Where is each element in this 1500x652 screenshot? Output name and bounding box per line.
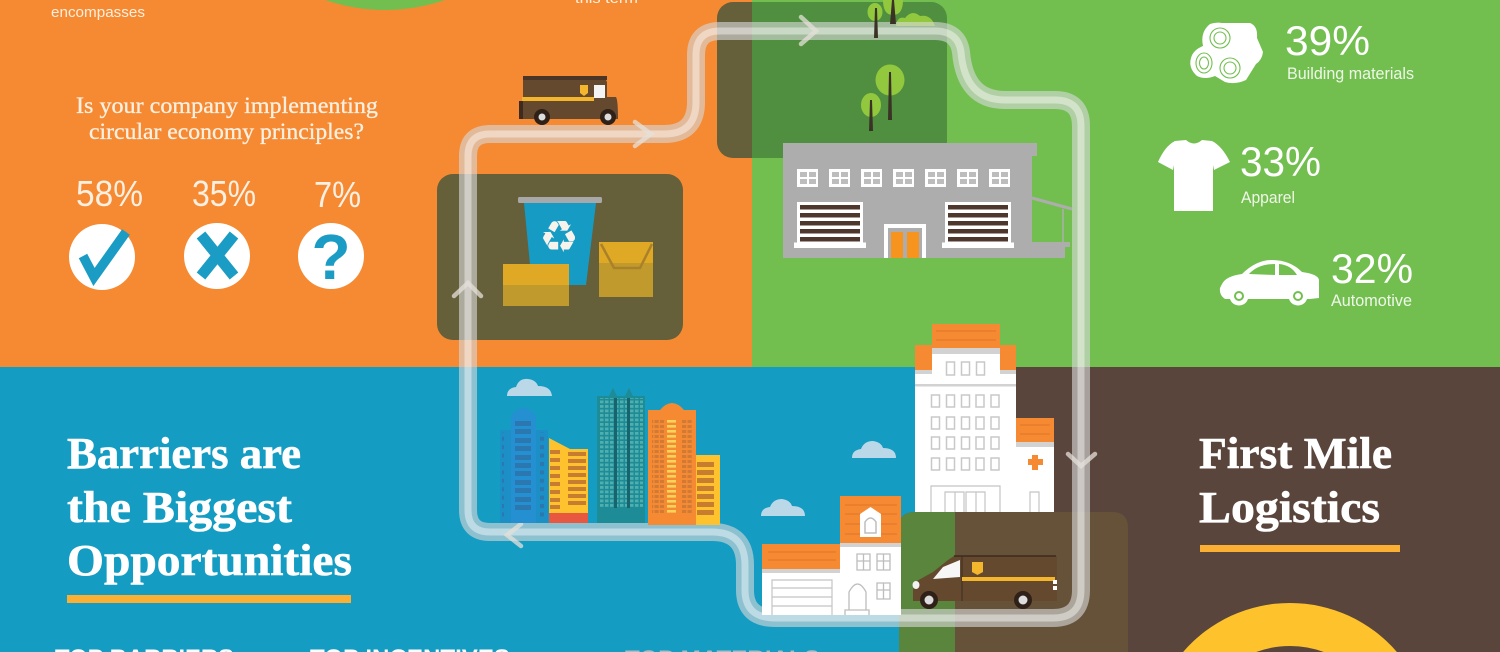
cardboard box open [599, 242, 653, 297]
tree: top left [868, 3, 882, 38]
hospital cross [1028, 455, 1043, 470]
icon: house with garage [762, 496, 901, 615]
arrow: right upper [801, 17, 816, 44]
panel: recycling box [437, 174, 683, 340]
stat: automotive: 32% [1331, 245, 1413, 292]
survey results [69, 173, 364, 293]
factory windows [797, 169, 1010, 187]
bushes behind road [896, 13, 935, 26]
heading: First Mile Logistics: First Mile [1199, 429, 1392, 478]
heading underline [67, 595, 351, 603]
trees [861, 0, 904, 131]
heading: Barriers are the Biggest Opportunities [67, 429, 352, 585]
text: encompasses: encompasses [51, 4, 145, 21]
question heading: Is your company implementing [76, 93, 379, 118]
stat: building materials [1190, 17, 1414, 83]
stat: building materials: Building materials [1287, 64, 1414, 83]
heading: Barriers are the Biggest Opportunities: Opportunities [67, 536, 352, 585]
tree: top right [883, 0, 903, 24]
stat: 7% unsure [298, 174, 364, 293]
icon: delivery van [912, 556, 1057, 609]
icon: car [1220, 260, 1319, 306]
cloud [761, 499, 805, 516]
dormer [860, 507, 881, 537]
stat: 58% yes [69, 173, 143, 290]
house windows [845, 554, 890, 615]
arrows on road [454, 17, 1095, 546]
tree: small [861, 93, 881, 131]
garage door right [942, 202, 1014, 248]
stat: apparel: Apparel [1241, 188, 1295, 207]
panel: van box green portion [899, 512, 955, 652]
heading: Barriers are the Biggest Opportunities: Barriers are [67, 429, 301, 478]
panel: brown quadrant [955, 367, 1500, 652]
icon: recycling bin and boxes [503, 197, 653, 306]
hospital windows [932, 362, 999, 470]
stat: 35% no [184, 173, 256, 289]
yellow building [549, 438, 588, 523]
icon: t-shirt [1158, 140, 1230, 211]
heading: Barriers are the Biggest Opportunities: the Biggest [67, 483, 292, 532]
stat: automotive: Automotive [1331, 291, 1412, 310]
stat: 7% unsure: ? [311, 221, 351, 293]
panel: forest box [717, 2, 947, 158]
yellow low building [696, 455, 720, 525]
panel: van box [899, 512, 1128, 652]
panel: green quadrant [752, 0, 1500, 367]
garage door left [794, 202, 866, 248]
bin: ♻ [539, 212, 579, 263]
green circle cropped at top [325, 0, 445, 10]
circular road [468, 31, 1081, 618]
stat: 35% no: 35% [192, 173, 256, 214]
stat: 7% unsure: 7% [314, 174, 361, 215]
stat: 58% yes: 58% [76, 173, 143, 214]
question heading: circular economy principles? [89, 119, 364, 144]
arrow: down [1068, 454, 1095, 466]
garage door [772, 580, 832, 615]
teal tower [597, 388, 645, 523]
hospital entrance [931, 486, 1039, 512]
heading: First Mile Logistics [1199, 429, 1392, 532]
donut chart cropped [1183, 603, 1397, 652]
icon: hospital [915, 324, 1054, 512]
cloud [852, 441, 896, 458]
icon: factory [783, 143, 1072, 258]
bin [518, 197, 602, 285]
question heading [76, 93, 379, 144]
heading underline [1200, 545, 1400, 552]
stat: apparel: 33% [1240, 138, 1321, 185]
stat: building materials: 39% [1285, 17, 1370, 64]
heading: First Mile Logistics: Logistics [1199, 483, 1380, 532]
city skyline [500, 379, 720, 525]
panel: blue quadrant [0, 367, 955, 652]
arrow: right lower [635, 122, 651, 146]
arrow: left [507, 524, 521, 546]
cardboard box front [503, 264, 569, 306]
factory door [884, 224, 926, 258]
orange tower [648, 403, 696, 525]
tree: large [876, 64, 904, 120]
arrow: up [454, 283, 481, 296]
icon: delivery truck [519, 76, 618, 125]
panel: orange quadrant [0, 0, 752, 367]
blue tower [500, 408, 548, 523]
stat: automotive [1220, 245, 1413, 310]
icon: logs [1190, 23, 1263, 83]
cloud [507, 379, 552, 396]
stat: apparel [1158, 138, 1321, 211]
